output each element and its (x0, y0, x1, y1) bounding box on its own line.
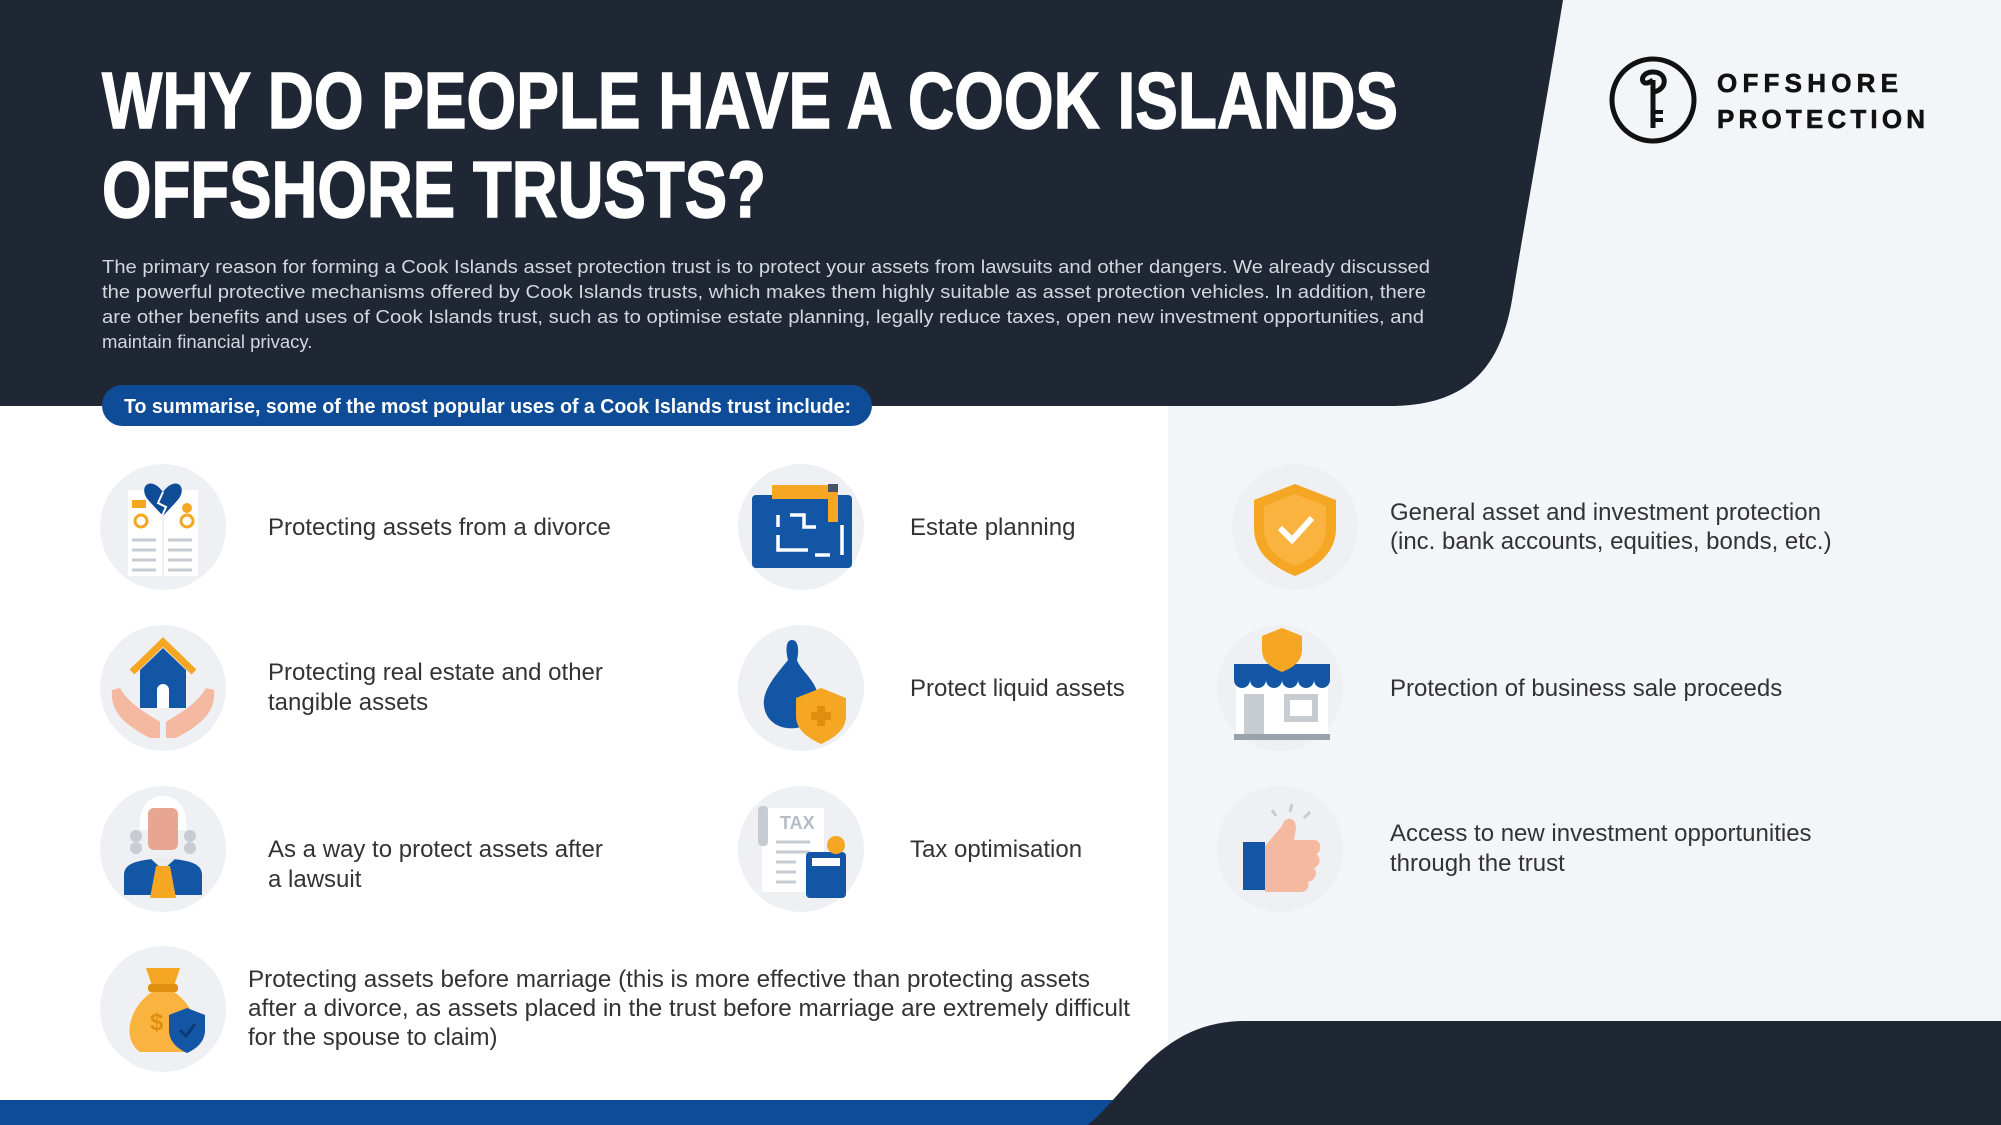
item: general asset protection: (inc. bank accounts, equities, bonds, etc.) (1390, 528, 1832, 555)
item: business sale: Protection of business sale proceeds (1390, 675, 1782, 702)
item: tax: TAX (780, 813, 815, 833)
logo (1612, 59, 1925, 141)
bottom right dark shape (1088, 1021, 2001, 1125)
item: general asset protection: General asset and investment protection (1390, 499, 1821, 526)
item: general asset protection (1232, 464, 1832, 590)
item: estate planning: Estate planning (910, 514, 1075, 541)
item: lawsuit: As a way to protect assets after (268, 836, 603, 863)
item: real estate (100, 625, 603, 751)
intro paragraph: are other benefits and uses of Cook Islands trust, such as to optimise estate planning, legally reduce taxes, open new investment opportunities, and (102, 306, 1424, 327)
intro paragraph (102, 256, 1430, 352)
intro paragraph: maintain financial privacy. (102, 331, 312, 352)
item: investment opportunities: Access to new investment opportunities (1390, 820, 1812, 847)
item: lawsuit: a lawsuit (268, 866, 362, 893)
item: business sale (1217, 625, 1782, 751)
item: liquid assets (738, 625, 1125, 751)
logo: OFFSHORE (1717, 68, 1898, 98)
item: before marriage: after a divorce, as assets placed in the trust before marriage are extremely difficult (248, 995, 1130, 1022)
item: before marriage (100, 946, 1130, 1072)
item: lawsuit (100, 786, 603, 912)
item: tax: Tax optimisation (910, 836, 1082, 863)
summary pill (102, 385, 872, 426)
logo: PROTECTION (1717, 104, 1925, 134)
summary pill: To summarise, some of the most popular uses of a Cook Islands trust include: (124, 396, 851, 418)
item: before marriage: for the spouse to claim) (248, 1024, 497, 1051)
title: WHY DO PEOPLE HAVE A COOK ISLANDS (102, 56, 1398, 145)
item: investment opportunities: through the trust (1390, 850, 1565, 877)
item: liquid assets: Protect liquid assets (910, 675, 1125, 702)
item: estate planning (738, 464, 1075, 590)
bottom blue bar (0, 1100, 2001, 1125)
header background panel (0, 0, 1563, 406)
item: before marriage: $ (150, 1009, 164, 1036)
item: divorce: Protecting assets from a divorce (268, 514, 611, 541)
item: investment opportunities (1217, 786, 1812, 912)
title: OFFSHORE TRUSTS? (102, 145, 766, 234)
item: divorce (100, 464, 611, 590)
item: tax (738, 786, 1082, 912)
title (102, 56, 1398, 234)
intro paragraph: the powerful protective mechanisms offered by Cook Islands trusts, which makes them highly suitable as asset protection vehicles. In addition, there (102, 281, 1426, 302)
item: real estate: tangible assets (268, 689, 428, 716)
item: before marriage: Protecting assets before marriage (this is more effective than protecting assets (248, 966, 1090, 993)
item: real estate: Protecting real estate and other (268, 659, 603, 686)
intro paragraph: The primary reason for forming a Cook Islands asset protection trust is to protect your assets from lawsuits and other dangers. We already discussed (102, 256, 1430, 277)
